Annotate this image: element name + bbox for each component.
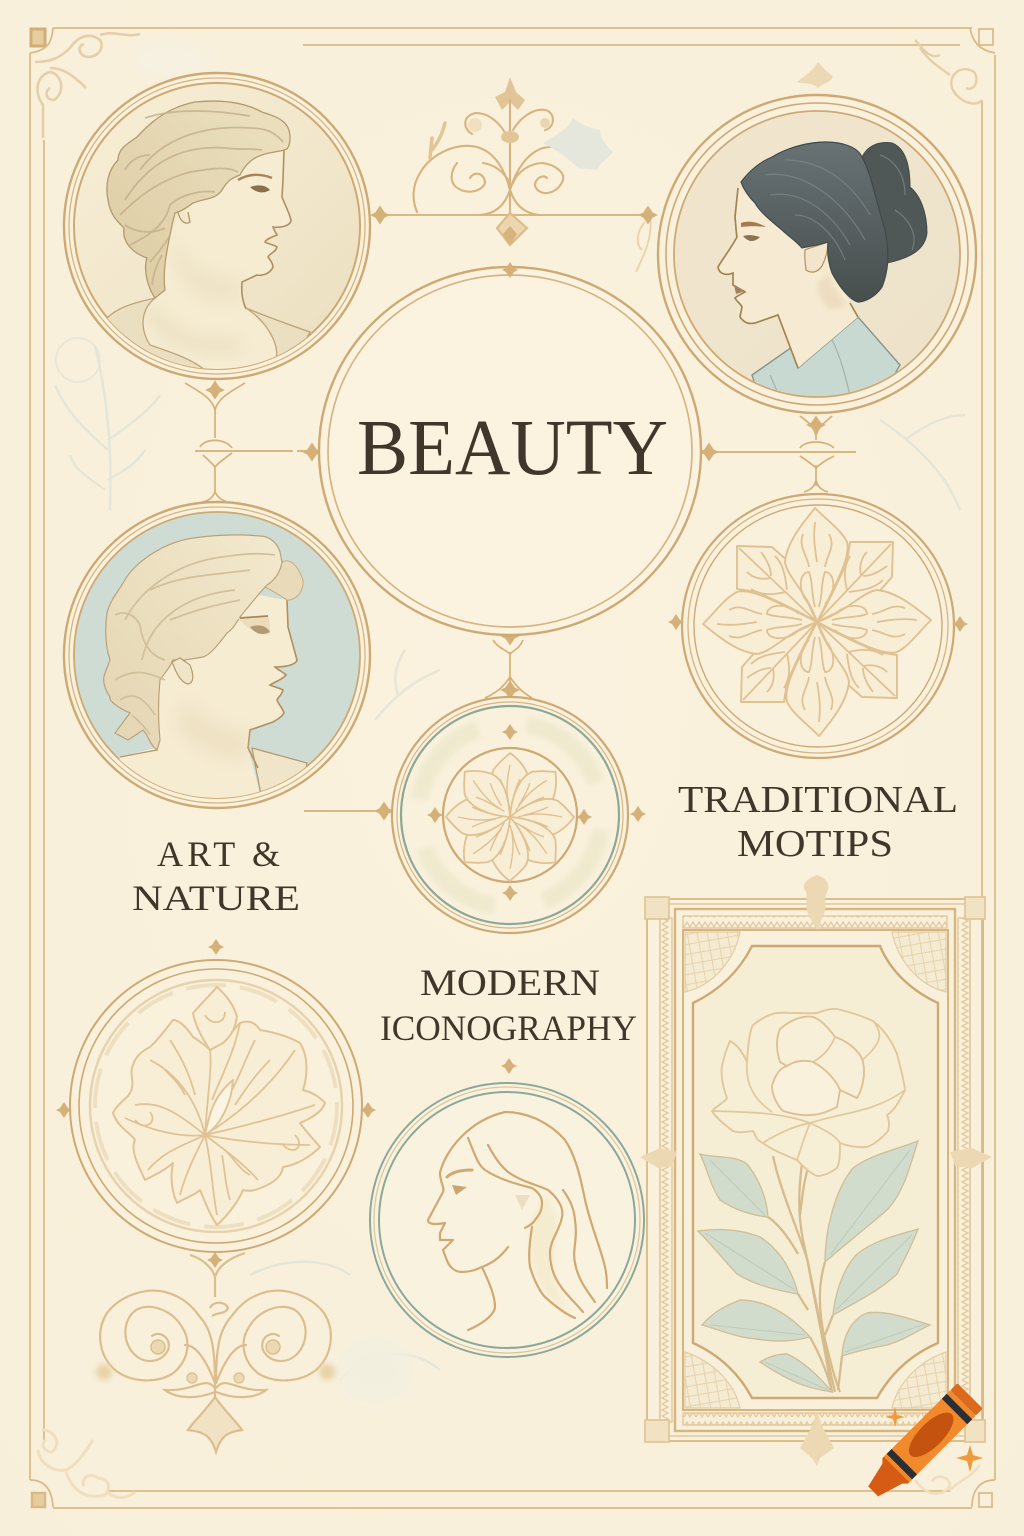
line portrait (428, 1112, 607, 1330)
medallion: traditional motif rosette (668, 494, 968, 758)
ornament: top right small finial (797, 62, 833, 88)
medallion: classical bust on blue (64, 502, 370, 808)
ornament: top fleur scroll (414, 77, 613, 245)
title: BEAUTY (357, 405, 668, 492)
faint background botanical washes (55, 42, 965, 1405)
flower illustration (698, 1009, 930, 1392)
label: traditional motifs (678, 779, 958, 865)
corner ornament: top right (915, 28, 995, 104)
blue bust figure (104, 535, 307, 800)
label: art and nature: NATURE (132, 878, 300, 918)
medallion: modern line portrait (370, 1083, 644, 1357)
corner ornament: bottom right (915, 1465, 995, 1507)
medallion: small center rosette (392, 697, 646, 933)
corner ornament: bottom left (30, 1430, 135, 1507)
icon: orange crayon logo (861, 1383, 983, 1505)
medallion: classical bust top left (64, 73, 370, 380)
label: traditional motifs: TRADITIONAL (678, 779, 958, 821)
top frame knot (804, 875, 828, 930)
classical bust figure (107, 101, 310, 380)
label: modern iconography (380, 963, 637, 1074)
medallion: lower left floral (56, 939, 376, 1252)
corner ornament: top left (30, 28, 140, 138)
ornament: lower left scrolls (96, 1252, 335, 1452)
medallion: woman with dark hair top right (658, 95, 976, 413)
side frame knots (640, 1148, 992, 1168)
flower panel (693, 946, 938, 1398)
woman profile figure (718, 142, 927, 400)
label: traditional motifs: MOTIPS (737, 823, 893, 865)
connector lines between medallions (185, 207, 856, 819)
bottom frame knot (800, 1412, 834, 1466)
label: modern iconography: MODERN (420, 963, 600, 1004)
label: art and nature: ART & (157, 834, 280, 874)
label: art and nature (132, 834, 300, 918)
ornate floral panel frame (640, 875, 992, 1466)
central medallion (319, 262, 701, 635)
lower left flower (113, 987, 325, 1225)
label: modern iconography: ICONOGRAPHY (380, 1008, 637, 1048)
